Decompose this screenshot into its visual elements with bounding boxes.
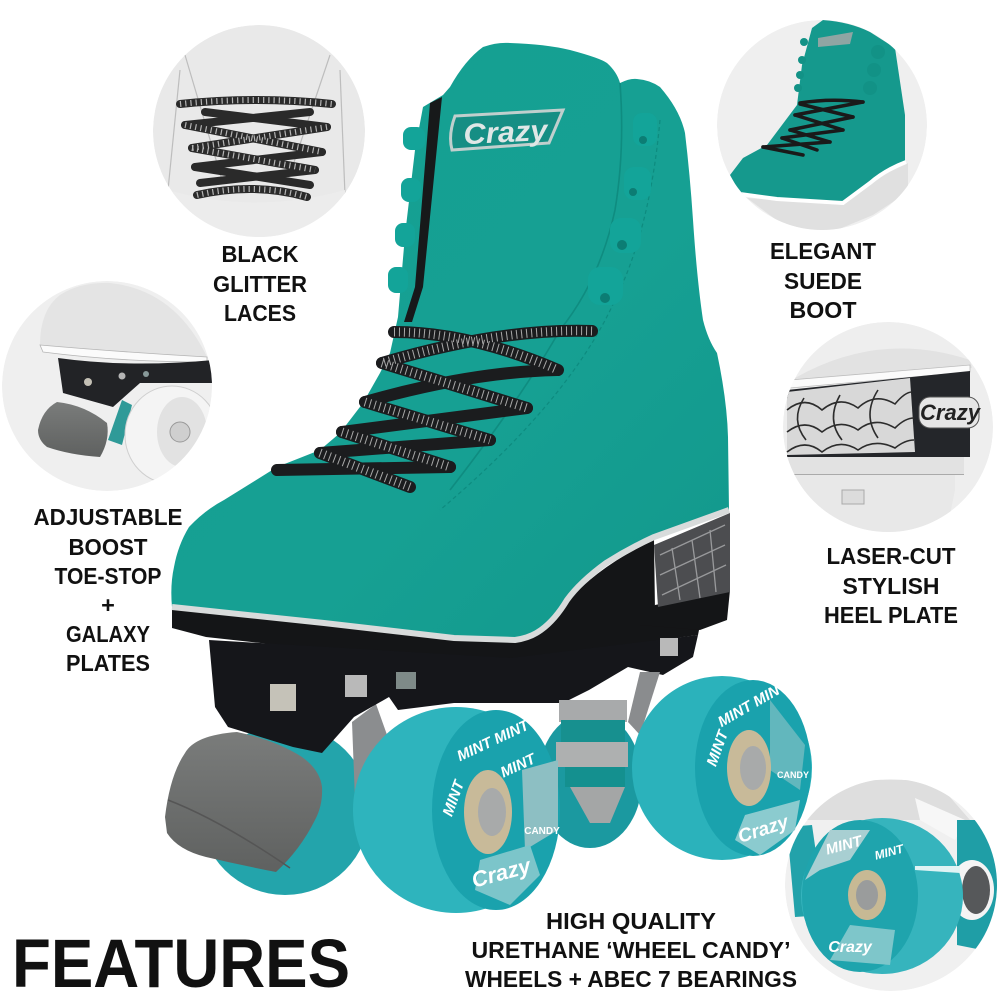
panel: adjustable toe stop detail bbox=[2, 281, 219, 491]
label: adjustable boost toe-stop and galaxy plates: GALAXY bbox=[66, 621, 150, 647]
wheel lettering: MINT bbox=[498, 750, 540, 781]
truck hanger left bbox=[352, 704, 396, 808]
label: elegant suede boot: BOOT bbox=[790, 297, 857, 323]
heel black bbox=[640, 590, 730, 630]
toe stop bbox=[165, 732, 322, 872]
label: adjustable boost toe-stop and galaxy plates: BOOST bbox=[68, 534, 148, 560]
label: elegant suede boot: ELEGANT bbox=[770, 238, 877, 264]
eyelet studs bbox=[388, 113, 657, 305]
label: black glitter laces: LACES bbox=[224, 300, 296, 326]
stitching bbox=[440, 120, 660, 510]
heel plate bbox=[654, 513, 730, 607]
label: black glitter laces: GLITTER bbox=[213, 271, 307, 297]
label: adjustable boost toe-stop and galaxy plates: TOE-STOP bbox=[54, 563, 162, 589]
lace glitter bbox=[320, 331, 592, 487]
back wheel bbox=[632, 676, 812, 860]
wheel lettering: Crazy bbox=[828, 939, 873, 956]
label: laser-cut stylish heel plate: STYLISH bbox=[842, 573, 940, 599]
panel: elegant suede boot detail bbox=[717, 20, 927, 232]
brand logo: Crazy bbox=[463, 115, 550, 151]
label: adjustable boost toe-stop and galaxy plates bbox=[34, 504, 182, 676]
laces bbox=[277, 331, 592, 487]
wheel lettering: Crazy bbox=[735, 811, 793, 848]
quarter seam bbox=[450, 83, 622, 490]
wheel lettering: CANDY bbox=[777, 770, 809, 780]
label: laser-cut stylish heel plate: LASER-CUT bbox=[826, 543, 956, 569]
label: elegant suede boot bbox=[770, 238, 877, 323]
boot upper bbox=[171, 43, 729, 640]
label: wheels and bearings: URETHANE ‘WHEEL CANDY’ bbox=[472, 937, 790, 963]
wheel lettering bbox=[824, 832, 907, 956]
wheel: middle behind bbox=[538, 712, 642, 848]
label: elegant suede boot: SUEDE bbox=[784, 268, 862, 294]
wheel: rear-left behind bbox=[200, 725, 370, 895]
mini boot bbox=[730, 20, 905, 202]
title: features: FEATURES bbox=[12, 925, 350, 1000]
wheel lettering: MINT bbox=[704, 727, 733, 769]
mesh plate bbox=[787, 378, 915, 455]
wheel lettering: MINT MINT bbox=[715, 676, 792, 731]
silver trim bbox=[172, 510, 729, 640]
label: laser-cut stylish heel plate bbox=[824, 543, 958, 628]
inner lining bbox=[404, 97, 442, 322]
panel: laser-cut heel plate detail bbox=[783, 322, 993, 540]
wheel lettering: MINT bbox=[824, 832, 866, 859]
label: adjustable boost toe-stop and galaxy plates: + bbox=[101, 592, 115, 618]
logo pill: Crazy bbox=[920, 400, 982, 425]
label: adjustable boost toe-stop and galaxy plates: ADJUSTABLE bbox=[34, 504, 182, 530]
wheel lettering bbox=[440, 716, 560, 893]
wheel lettering: CANDY bbox=[524, 826, 560, 837]
sole rim bbox=[172, 540, 700, 660]
wheel lettering bbox=[704, 676, 809, 848]
label: black glitter laces bbox=[213, 241, 307, 326]
plate bbox=[209, 635, 698, 753]
label: adjustable boost toe-stop and galaxy plates: PLATES bbox=[66, 650, 150, 676]
front wheel bbox=[353, 707, 560, 913]
wheel lettering: MINT bbox=[873, 841, 907, 863]
label: laser-cut stylish heel plate: HEEL PLATE bbox=[824, 602, 958, 628]
panel: black glitter laces detail bbox=[153, 25, 365, 240]
brand logo bbox=[451, 110, 563, 151]
label: black glitter laces: BLACK bbox=[222, 241, 299, 267]
sole outline bbox=[747, 163, 908, 232]
wheel lettering: MINT MINT bbox=[454, 716, 533, 765]
label: wheels and bearings: HIGH QUALITY bbox=[546, 908, 716, 934]
kingpin bbox=[556, 672, 660, 823]
panel: wheel candy detail bbox=[785, 779, 997, 991]
illustration: roller skate bbox=[165, 43, 812, 913]
label: wheels and bearings: WHEELS + ABEC 7 BEARINGS bbox=[465, 966, 797, 992]
wheel lettering: MINT bbox=[440, 777, 469, 819]
bolts bbox=[270, 638, 678, 711]
label: wheels and bearings bbox=[465, 908, 797, 992]
wheel lettering: Crazy bbox=[469, 852, 535, 893]
